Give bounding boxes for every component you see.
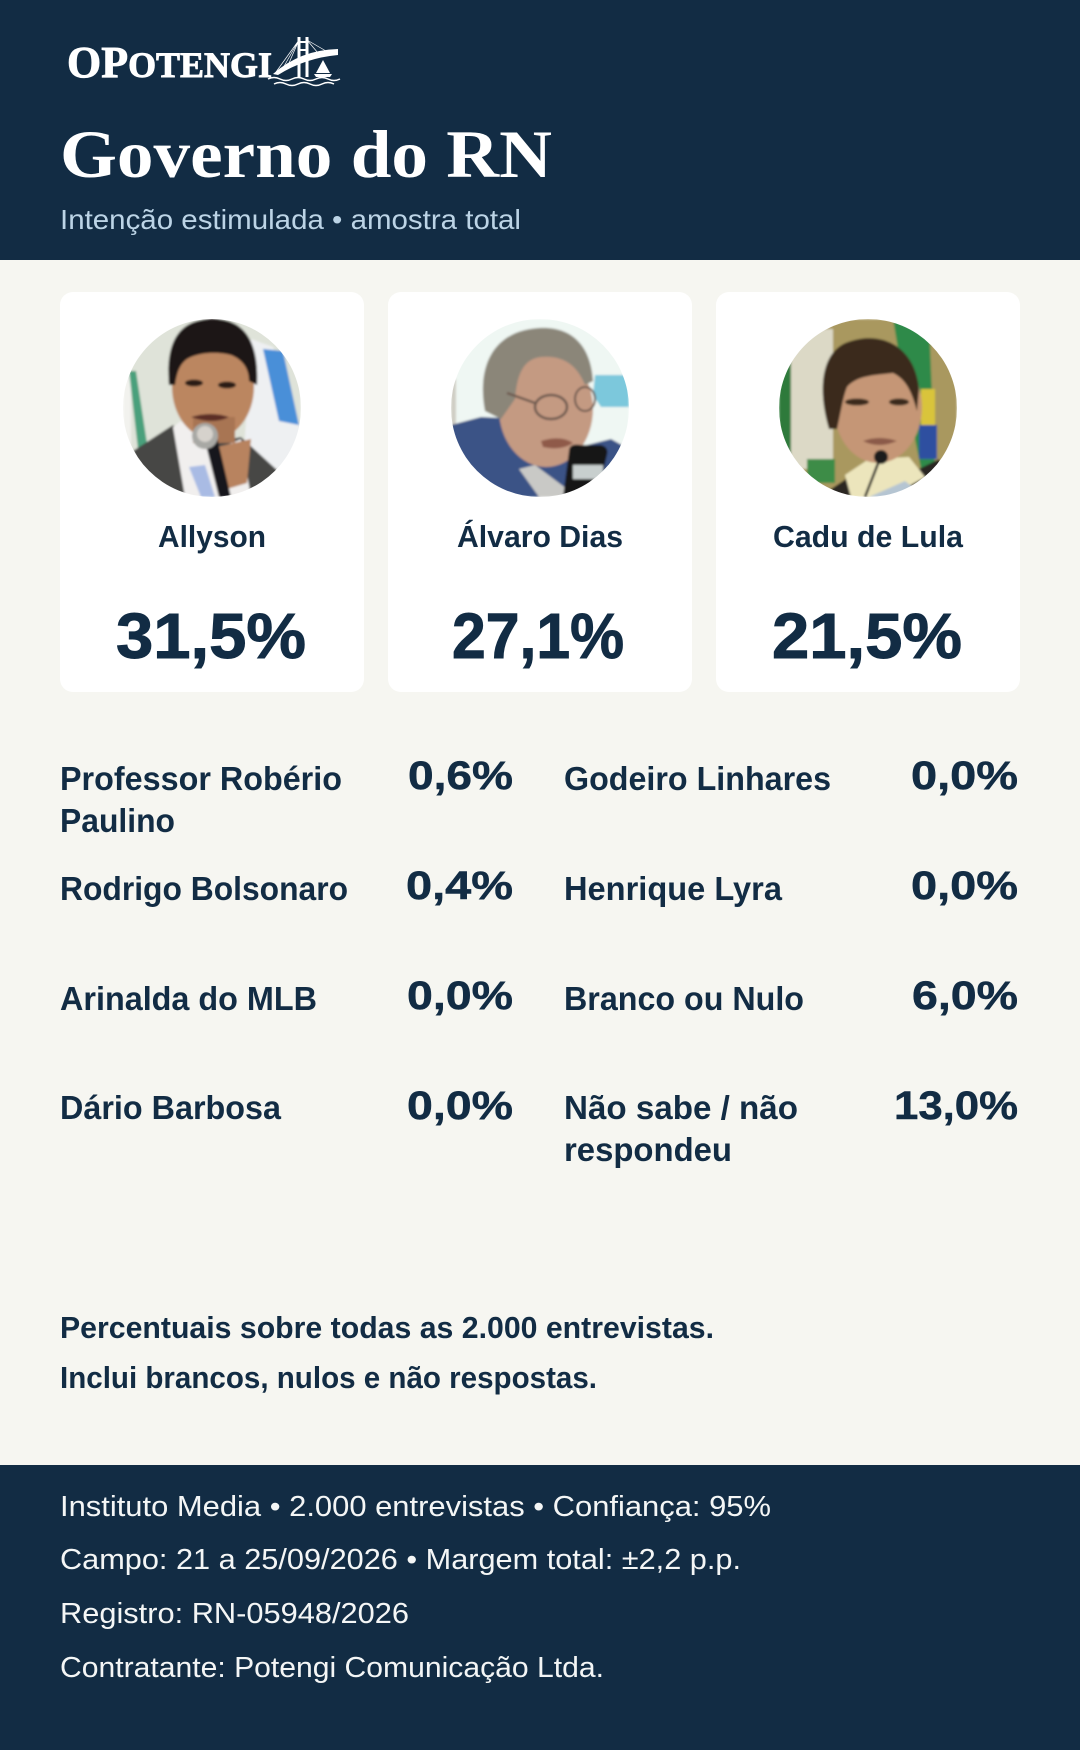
row: Henrique Lyra bbox=[564, 864, 1018, 908]
methodology lines: Registro: RN-05948/2026 bbox=[60, 1598, 409, 1630]
row: Professor Robério Paulino: 0,6% bbox=[408, 754, 513, 798]
methodology lines: Instituto Media • 2.000 entrevistas • Confiança: 95% bbox=[60, 1491, 771, 1523]
row: Professor Robério Paulino: Paulino bbox=[60, 802, 175, 839]
photo: Cadu de Lula bbox=[779, 319, 957, 497]
photo: Allyson bbox=[123, 319, 301, 497]
panel: candidate Álvaro Dias bbox=[388, 292, 692, 692]
row: Dário Barbosa: Dário Barbosa bbox=[60, 1089, 282, 1126]
row: Godeiro Linhares: Godeiro Linhares bbox=[564, 760, 831, 797]
percentage: 27,1% bbox=[452, 600, 624, 672]
row: Branco ou Nulo: Branco ou Nulo bbox=[564, 980, 804, 1017]
row: Não sabe / não respondeu bbox=[564, 1084, 1018, 1168]
methodology lines: Campo: 21 a 25/09/2026 • Margem total: ±2,2 p.p. bbox=[60, 1544, 741, 1576]
row: Dário Barbosa: 0,0% bbox=[407, 1084, 513, 1128]
row: Arinalda do MLB: 0,0% bbox=[407, 974, 513, 1018]
row: Rodrigo Bolsonaro: 0,4% bbox=[406, 864, 513, 908]
methodology lines: Contratante: Potengi Comunicação Ltda. bbox=[60, 1652, 604, 1684]
panel: candidate Cadu de Lula bbox=[716, 292, 1020, 692]
row: Não sabe / não respondeu: Não sabe / não bbox=[564, 1089, 798, 1126]
row: Professor Robério Paulino: Professor Robério bbox=[60, 760, 342, 797]
photo: Álvaro Dias bbox=[451, 319, 629, 497]
row: Branco ou Nulo: 6,0% bbox=[912, 974, 1018, 1018]
name: Álvaro Dias bbox=[457, 519, 623, 554]
header band bbox=[0, 0, 1080, 260]
percentage: 21,5% bbox=[772, 600, 962, 672]
row: Godeiro Linhares: 0,0% bbox=[911, 754, 1018, 798]
note bbox=[60, 1310, 714, 1395]
percentage: 31,5% bbox=[116, 600, 306, 672]
row: Não sabe / não respondeu: respondeu bbox=[564, 1131, 732, 1168]
name: Cadu de Lula bbox=[773, 519, 964, 554]
row: Branco ou Nulo bbox=[564, 974, 1018, 1018]
panel: candidate Allyson bbox=[60, 292, 364, 692]
row: Professor Robério Paulino bbox=[60, 754, 513, 839]
note: Inclui brancos, nulos e não respostas. bbox=[60, 1360, 597, 1395]
row: Arinalda do MLB bbox=[60, 974, 513, 1018]
row: Rodrigo Bolsonaro bbox=[60, 864, 513, 908]
name: Allyson bbox=[158, 519, 266, 554]
subtitle: Intenção estimulada • amostra total bbox=[60, 204, 521, 235]
list: other candidates bbox=[60, 754, 1018, 1168]
footer bbox=[0, 1465, 1080, 1750]
methodology lines bbox=[60, 1491, 771, 1684]
row: Não sabe / não respondeu: 13,0% bbox=[894, 1084, 1018, 1128]
row: Henrique Lyra: Henrique Lyra bbox=[564, 870, 783, 907]
row: Dário Barbosa bbox=[60, 1084, 513, 1128]
title: Governo do RN bbox=[60, 116, 552, 192]
row: Godeiro Linhares bbox=[564, 754, 1018, 798]
row: Henrique Lyra: 0,0% bbox=[911, 864, 1018, 908]
note: Percentuais sobre todas as 2.000 entrevistas. bbox=[60, 1310, 714, 1345]
row: Rodrigo Bolsonaro: Rodrigo Bolsonaro bbox=[60, 870, 348, 907]
row: Arinalda do MLB: Arinalda do MLB bbox=[60, 980, 317, 1017]
logo: O Potengi: OPOTENGI bbox=[67, 38, 272, 87]
